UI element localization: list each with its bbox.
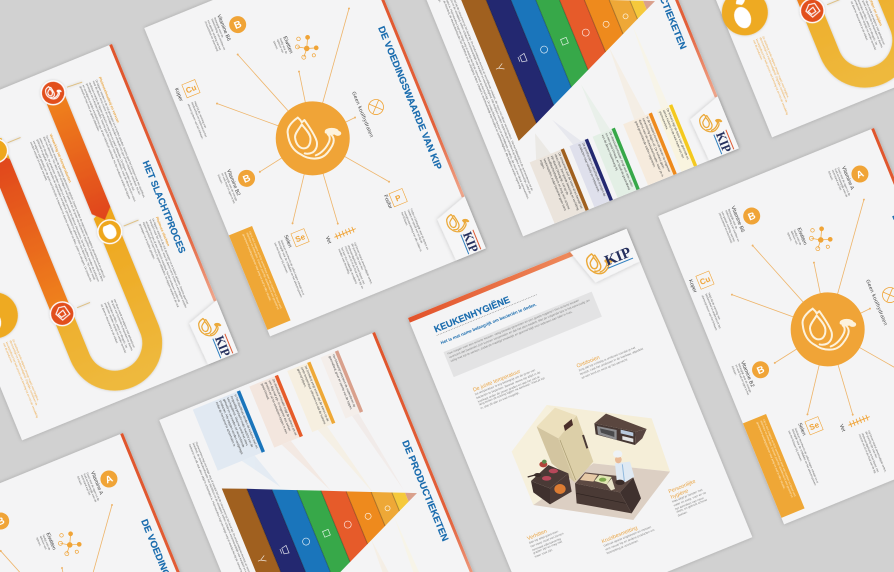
item: eiwitten: Nodig voor de opbouw van spieren. [35, 534, 51, 551]
item: vitamine A: A [855, 168, 866, 181]
radial diagram [201, 7, 424, 250]
item: eiwitten: Eiwitten [795, 227, 808, 246]
section: persoonlijke hygiene: Was altijd je handen met water en zeep, voor en na het aanraken van rauw vlees, en gebruik schone doeken. [672, 488, 708, 518]
chain panel: gold [287, 362, 335, 432]
section: kruisbesmetting: Gebruik aparte snijplanken en messen voor rauwe kip en andere producten om besmetting te voorkomen. [603, 525, 655, 555]
item: fosfor: Fosfor is belangrijk voor de botten en tanden en speelt een rol bij de energievoorziening van alle cellen in het lichaam. [400, 208, 429, 252]
item: vitamine B6 [0, 503, 13, 538]
item: selenium: Selenium beschermt de cellen tegen schade en is belangrijk voor de schildklier en het afweersysteem van het lichaam bij mensen. [787, 428, 819, 486]
item: vitamine B2: Belangrijk voor de energie en voor huid en ogen in het lichaam. [217, 172, 238, 204]
chain panel: navy [569, 139, 613, 207]
item: geen koolhydraten [350, 83, 393, 139]
process band [649, 0, 894, 122]
section: de juiste temperatuur [472, 361, 554, 424]
item: vitamine A: Goed voor de ogen en de huid en belangrijk voor de weerstand van het lichaam. [827, 167, 851, 198]
radial diagram [716, 198, 894, 441]
step text 3: De kippen worden in de stal gevangen en in kratten geladen. Daarna gaat het transport naar het slachthuis, waar de dieren eerst rusten en vervolgens worden verdoofd met gas of een elektrisch waterbad. Na het verdoven worden de kippen geslacht en laat men ze goed uitbloeden. De kippen worden in de stal gevangen en in kratten geladen. [138, 218, 189, 309]
logo tab [570, 229, 641, 287]
item: vitamine B6: Vitamine B6 [729, 205, 745, 233]
orange note: De slachterij werkt volgens strenge regels voor hygiëne, dierenwelzijn en voedselveiligheid. Dagelijks controleert de keuringsdienst het hele proces van levering tot en met de verpakking van de producten. [2, 339, 39, 418]
item: vitamine A: Vitamine A [840, 166, 855, 191]
logo tab: KIP [460, 229, 482, 255]
item: vitamine A: Goed voor de ogen en de huid en belangrijk voor de weerstand van het lichaam. [76, 472, 100, 503]
item: vitamine B2: B [241, 173, 252, 186]
item: vitamine B6 [716, 198, 767, 245]
step heading 3: Pluimvee slachten [155, 216, 170, 247]
item: koper: Koper [173, 87, 184, 103]
stove [528, 460, 572, 504]
chain panel: pink: Het fokbedrijf selecteert de ouderdieren op gezondheid, groei en sterkte van de kippen. [328, 354, 357, 411]
item: vitamine B6: B [747, 211, 758, 223]
process band [0, 70, 192, 425]
panel: het slachtproces (left) [0, 44, 238, 441]
logo tab: KIP [212, 333, 234, 359]
section: ontdooien: Zorg dat kip volledig is ontdooid voordat je het bereidt. Laat het ontdooien in de koelkast, afgedekt op een bord en nooit op het aanrecht. [578, 345, 644, 379]
item: vitamine B2: Vitamine B2 [225, 169, 241, 197]
panel: de voedingswaarde van kip (top) [144, 0, 486, 336]
item: eiwitten [786, 218, 835, 261]
item: fosfor: Fosfor [382, 194, 393, 210]
item: eiwitten: Eiwitten [281, 35, 294, 55]
step heading 2: Verwerking tot vleesproducten [49, 133, 72, 183]
item: vitamine B2 [216, 161, 262, 207]
section: kruisbesmetting [601, 518, 665, 569]
section: verhitten [526, 523, 577, 572]
item: vitamine B6 [202, 6, 253, 54]
chain panel: gold: De broederij zorgt ervoor dat de eieren op de juiste temperatuur uitkomen en dat de kuikens gezond blijven. [296, 365, 330, 425]
panel: de voedingswaarde van kip (right) [658, 128, 894, 524]
chain panel: navy: De groothandel en detailhandel brengen de producten naar winkels en restaurants. [578, 142, 607, 197]
logo tab: KIP [713, 129, 735, 155]
item: eiwitten: Nodig voor de opbouw van spieren. [786, 229, 802, 246]
chain panel: blue [193, 390, 265, 471]
section: verhitten: Verhitten [526, 529, 548, 542]
section: de juiste temperatuur: De temperatuur is erg belangrijk om de groei van bacteriën te beperken. Bewaar rauwe kip altijd in de koelkast onder de zeven graden en laat het niet te lang buiten de koeling liggen na aankoop. Vries je kip in, doe dit dan zo snel mogelijk. [474, 368, 545, 410]
item: eiwitten [272, 26, 321, 69]
panel: de productieketen (top) [397, 0, 739, 236]
item: vitamine B6: Belangrijk voor de stofwisseling van eiwitten en een goede werking van het zenuwstelsel en weerstand. [203, 17, 225, 53]
item: koper: Cu [185, 83, 198, 95]
step text 2: Na het slachten worden de karkassen gebroeid en geplukt. Daarna worden de ingewanden verwijderd, gecontroleerd en gekeurd door een dierenarts. Het vlees wordt vervolgens snel gekoeld om de groei van bacteriën te beperken en daarna versneden tot filets, poten en vleugels. De producten worden verpakt en verder verwerkt tot diverse vleeswaren. Na het slachten worden de karkassen gebroeid en geplukt. Daarna worden de ingewanden verwijderd, gecontroleerd en gekeurd door een dierenarts. Het vlees wordt vervolgens snel gekoeld om de groei van bacteriën te beperken en daarna versneden tot filets, poten en vleugels. De producten worden verpakt en verder verwerkt. [29, 135, 106, 282]
item: vitamine B2: Vitamine B2 [739, 360, 755, 388]
item: selenium [268, 228, 329, 305]
item: koper: Helpt bij de vorming van bindweefsel en ondersteunt het afweersysteem van het lichaam. [187, 101, 207, 140]
orange note: De slachterij werkt volgens strenge regels voor hygiëne, dierenwelzijn en voedselveiligheid. Dagelijks controleert de keuringsdienst het hele proces van levering tot en met de verpakking van de producten. [752, 36, 789, 115]
item: vitamine B6: Belangrijk voor de stofwisseling van eiwitten en een goede werking van het zenuwstelsel en weerstand. [717, 208, 739, 244]
item: vitamine B2: B [755, 364, 766, 377]
item: vet: Vet [838, 423, 846, 433]
chain panel: orange: In de broederij komen de eieren na ongeveer eenentwintig dagen uit. De kuikens gaan daarna naar de vleeskuikenhouder, waar ze in goed geventileerde stallen opgroeien. [634, 116, 672, 177]
section: de juiste temperatuur: De juiste temperatuur [472, 369, 522, 393]
step text 4: Het vlees wordt vervolgens snel gekoeld om de groei van bacteriën te beperken en daarna versneden tot filets, poten en vleugels. De producten worden verpakt en verder verwerkt tot diverse vleeswaren in de winkel. [100, 299, 135, 354]
chain panel: brown: De consument sluit de keten af en bereidt het vlees thuis. Een goede bewaring en verhitting zijn daarbij belangrijk. Let op de houdbaarheidsdatum en zorg voor schone keukenspullen, zodat bacteriën geen kans krijgen. [539, 152, 584, 211]
chain panel: green [593, 128, 640, 198]
panel: keukenhygiene [408, 229, 752, 572]
item: vet [838, 413, 892, 483]
item: vet: Kip bevat vooral onverzadigde vetten, die gunstig zijn voor het cholesterolgehalte in het bloed. Het meeste vet zit in de huid van de kip. [858, 430, 887, 475]
item: eiwitten: Eiwitten [44, 532, 57, 551]
section: ontdooien: Ontdooien [576, 355, 601, 370]
item: vitamine B6: B [233, 19, 243, 32]
chain panel: yellow: De fokkerij legt de basis voor gezonde en sterke kuikens in de hele keten van het pluimveevlees. [658, 108, 690, 160]
wall cabinet with microwave [594, 414, 647, 445]
item: vet [324, 225, 378, 295]
orange note [743, 414, 805, 518]
fridge [537, 408, 593, 482]
pyramid chart [215, 404, 456, 572]
section: persoonlijke hygiene: Persoonlijke [668, 479, 697, 495]
title: KEUKENHYGIËNE [433, 295, 512, 335]
item: koper: Cu [699, 274, 712, 287]
logo tab [433, 196, 486, 261]
intro box [444, 292, 602, 377]
orange note: Kip is een magere en licht verteerbare bron van eiwitten en bevat veel vitamines en mineralen. Daarom past kip uitstekend in een gezond en gevarieerd voedingspatroon voor jong en oud in elke situatie. [242, 231, 282, 310]
item: selenium: Se [294, 232, 307, 244]
item: selenium: Selenium beschermt de cellen tegen schade en is belangrijk voor de schildklier en het afweersysteem van het lichaam bij mensen. [273, 240, 305, 298]
chain panel: green: De vleeskuikenhouder zorgt voor voer, water en een goed klimaat, en houdt de gezondheid van de dieren nauwkeurig bij. [601, 131, 634, 190]
radial diagram [0, 504, 187, 572]
chain panel: orange [623, 113, 677, 185]
orange note [229, 226, 291, 330]
chef [613, 450, 634, 485]
item: vitamine A: A [104, 473, 115, 486]
step text 1: De kippen worden in de stal gevangen en in kratten geladen. Daarna gaat het transport naar het slachthuis, waar de dieren eerst rusten en vervolgens worden verdoofd met gas of een elektrisch waterbad. Na het verdoven worden de kippen geslacht en laat men ze goed uitbloeden. De kippen worden in de stal gevangen en in kratten geladen. Daarna gaat het transport naar het slachthuis, waar de dieren eerst rusten en vervolgens worden verdoofd met gas of een elektrisch waterbad. Na het verdoven worden de kippen geslacht en laat men ze goed uitbloeden. [79, 79, 145, 202]
section: persoonlijke hygiene: hygiëne [670, 488, 689, 501]
item: vitamine A: Vitamine A [89, 471, 104, 496]
panel: de productieketen (bottom) [159, 332, 501, 572]
item: koper [173, 80, 218, 146]
logo tab [686, 96, 739, 161]
chain panel: red [249, 375, 303, 448]
chain panel: blue: In het slachthuis worden de kuikens snel en zorgvuldig geslacht onder toezicht van de keuringsdienst. Daarna wordt het vlees gekoeld en versneden tot verschillende producten. Alle stappen worden vastgelegd, zodat de herkomst te achterhalen is. [215, 394, 259, 455]
title: DE PRODUCTIEKETEN [399, 439, 450, 543]
item: eiwitten [35, 523, 84, 566]
item: koper: Helpt bij de vorming van bindweefsel en ondersteunt het afweersysteem van het lichaam. [701, 292, 721, 331]
logo tab [185, 300, 238, 365]
chain panel: red: De vleeskuikenhouder krijgt de kuikens als ze een dag oud zijn. In ongeveer zes weken groeien ze uit tot volwassen kippen in een goed klimaat. [260, 378, 298, 436]
item: vet: Kip bevat vooral onverzadigde vetten, die gunstig zijn voor het cholesterolgehalte in het bloed. Het meeste vet zit in de huid van de kip en het kan dus makkelijk verwijderd worden voor bereiding. [337, 242, 373, 289]
item: vitamine A [827, 158, 875, 202]
title: DE VOEDINGSWAARDE VAN KIP [375, 25, 444, 172]
kitchen island [575, 472, 641, 513]
step heading 1: Pluimveehouderij en vervoer [98, 76, 120, 124]
title: HET SLACHTPROCES [140, 159, 187, 255]
item: selenium: Selen [796, 422, 807, 437]
item: koper: Koper [687, 279, 698, 294]
section: ontdooien [576, 337, 655, 395]
chain panel: brown [530, 148, 589, 224]
item: geen koolhydraten: Geen koolhydraten [350, 91, 374, 139]
item: vitamine B2: Belangrijk voor de energie en voor huid en ogen in het lichaam. [731, 363, 752, 396]
logo tab: KIP [603, 245, 634, 270]
item: fosfor: P [394, 193, 403, 203]
item: geen koolhydraten: Geen koolhydraten [864, 279, 888, 327]
item: vet: Vet [324, 235, 332, 245]
orange note: Kip is een magere en licht verteerbare bron van eiwitten en bevat veel vitamines en mineralen. Daarom past kip uitstekend in een gezond en gevarieerd voedingspatroon voor jong en oud in elke situatie. [756, 419, 796, 498]
pyramid chart [453, 0, 694, 163]
item: eiwitten: Nodig voor de opbouw van spieren. [272, 38, 288, 54]
chain panel: yellow [656, 104, 697, 172]
item: vitamine B6: Vitamine B6 [215, 14, 231, 42]
item: selenium: Se [808, 420, 821, 432]
panel: de voedingswaarde van kip (bottom left) [0, 433, 249, 572]
item: selenium [782, 416, 843, 493]
item: koper [687, 271, 732, 337]
chain panel: pink [321, 350, 363, 419]
subtitle: Het is met name belangrijk om bacteriën te doden. [440, 302, 537, 345]
item: vitamine B2 [730, 353, 776, 398]
item: fosfor [382, 187, 430, 260]
illustration: isometric kitchen [512, 405, 670, 520]
panel: het slachtproces (top right) [645, 0, 894, 138]
section: persoonlijke hygiene [667, 476, 717, 530]
item: selenium: Selen [282, 234, 293, 249]
section: verhitten: Bak kip altijd goed door. Het vlees moet van binnen minimaal vijfenzeventig graden zijn en mag niet meer roze zijn. [529, 529, 564, 559]
item: vitamine A [76, 463, 124, 507]
section: kruisbesmetting: Kruisbesmetting [601, 525, 638, 545]
item: geen koolhydraten [864, 271, 894, 327]
intro box: Hoe zorgen voor een schone keuken, veilig bereide gerechten en een goede hygiëne? Een schone keuken voorkomt dat bacteriën zich kunnen verspreiden en dat het eten bederft. Met de volgende tips is het eenvoudig om veilig met kip te werken, zodat de maaltijd smakelijk en gezond blijft voor iedereen aan tafel in huis. [447, 298, 590, 363]
